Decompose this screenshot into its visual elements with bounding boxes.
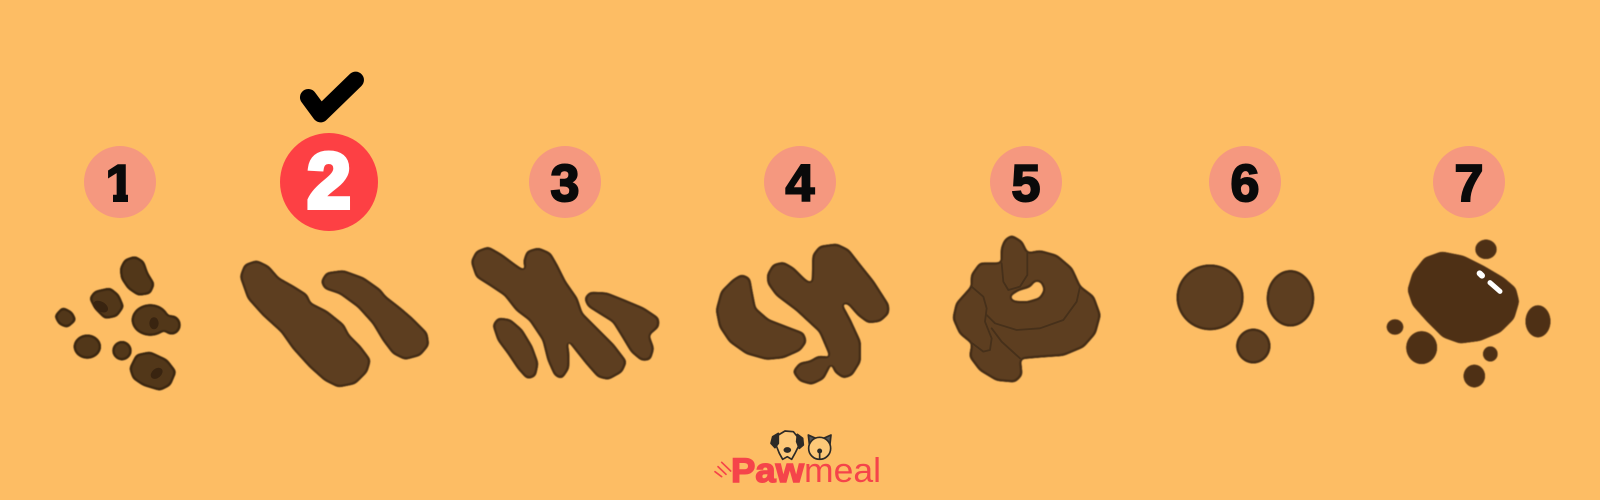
- stool type 5: soft coiled pile: [953, 236, 1100, 382]
- icon: cat face: [808, 435, 831, 459]
- number badge 2 highlighted: [280, 133, 378, 231]
- number badge 5: 5: [1012, 155, 1040, 213]
- stool type 3: cracked sausages: [472, 247, 658, 379]
- number badge 4: 4: [786, 155, 815, 213]
- icon: logo speed marks: [715, 462, 731, 477]
- logo wordmark: Paw: Paw: [731, 452, 805, 490]
- number badge 7: 7: [1455, 155, 1483, 213]
- stool type 4: smooth curved pieces: [717, 244, 888, 384]
- logo: Pawmeal: [715, 431, 881, 490]
- number badge 5: [990, 146, 1062, 218]
- number badge 7: [1433, 146, 1505, 218]
- icon: dog face: [771, 431, 803, 459]
- stool type 7: watery dark puddle with splatter: [1387, 240, 1550, 387]
- number badge 2 highlighted: 2: [307, 136, 351, 224]
- number badge 6: 6: [1231, 155, 1259, 213]
- number badge 4: [764, 146, 836, 218]
- number badge 1: [84, 146, 156, 218]
- logo wordmark: meal: meal: [804, 452, 881, 490]
- number badge 1: 1: [106, 155, 134, 213]
- number badge 6: [1209, 146, 1281, 218]
- stool type 1: separate hard lumps: [55, 257, 180, 390]
- number badge 3: 3: [551, 155, 579, 213]
- stool type 2: two lumpy logs: [241, 261, 428, 387]
- stool type 6: soft blobs: [1177, 265, 1313, 363]
- number badge 3: [529, 146, 601, 218]
- icon: check mark above number 2: [308, 80, 356, 114]
